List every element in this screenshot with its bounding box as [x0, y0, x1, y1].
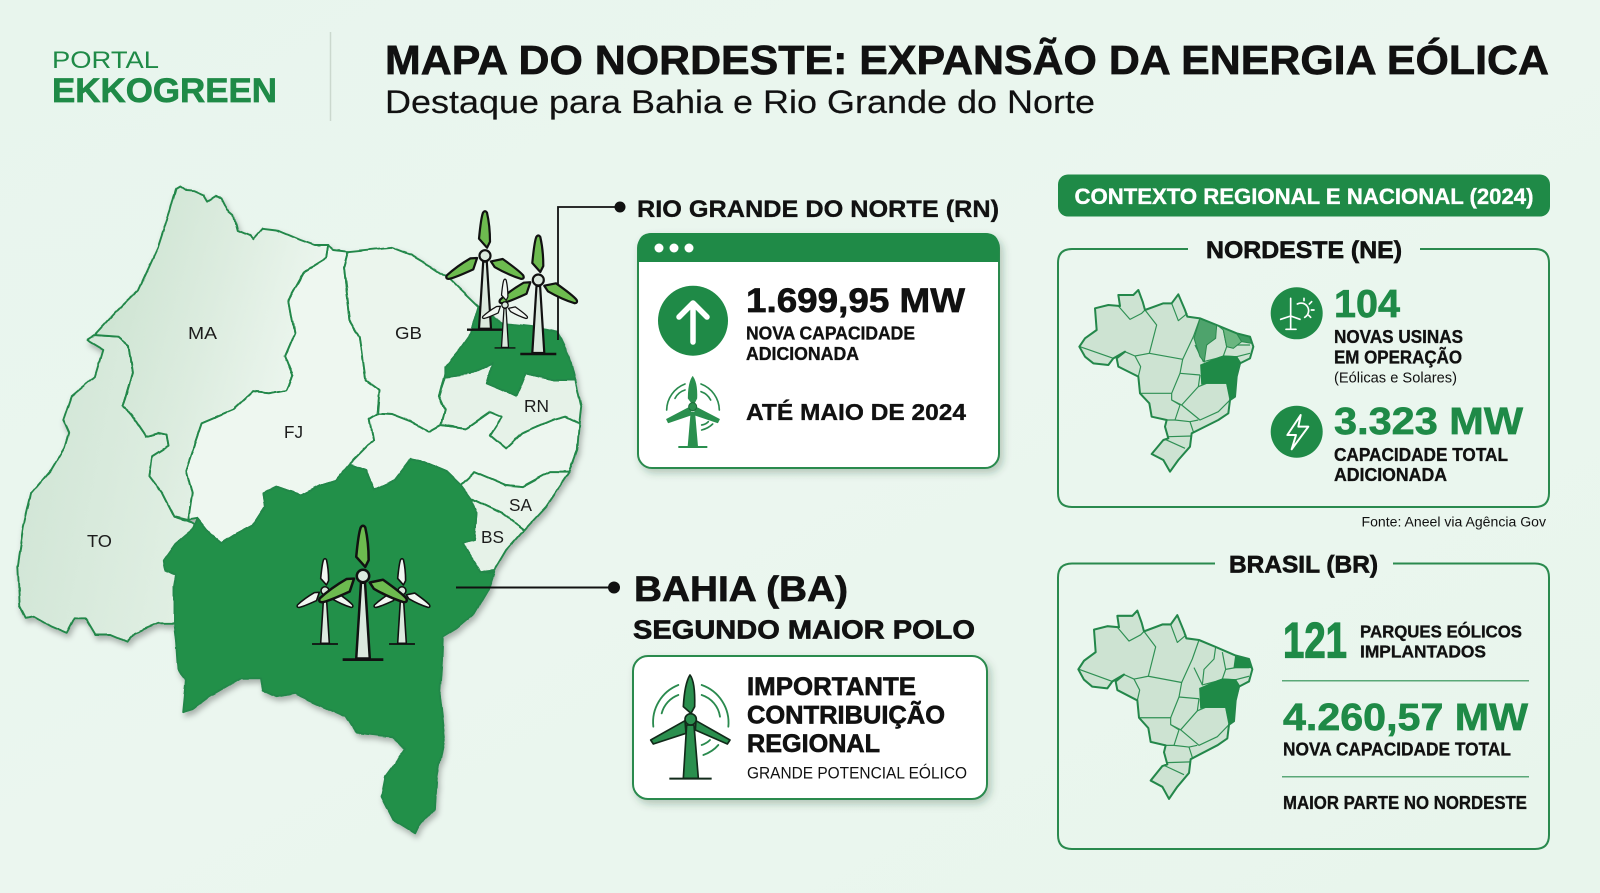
stat label: RN capacity: NOVA CAPACIDADE: [746, 324, 915, 344]
panel: Nordeste: [1058, 237, 1549, 507]
stat label: parques eólicos: IMPLANTADOS: [1360, 642, 1486, 662]
banner: contexto regional e nacional: [1058, 174, 1550, 216]
text: Até maio de 2024: ATÉ MAIO DE 2024: [746, 398, 966, 425]
header logo: Portal Ekkogreen: PORTAL: [52, 47, 159, 74]
stat label: novas usinas: EM OPERAÇÃO: [1334, 346, 1462, 368]
title: MAPA DO NORDESTE: EXPANSÃO DA ENERGIA EÓLICA: [385, 37, 1549, 83]
text: importante contribuição regional: REGIONAL: [747, 730, 880, 758]
panel: Rio Grande do Norte card: [638, 233, 999, 468]
map: Brazil with Northeast highlighted: [1079, 290, 1253, 472]
icon: up arrow: [658, 286, 728, 356]
state label: BS: BS: [481, 527, 504, 547]
stat label: novas usinas: (Eólicas e Solares): [1334, 370, 1457, 386]
wind turbines on Bahia: [295, 526, 432, 660]
connector: Rio Grande do Norte: [558, 202, 626, 340]
stat: 3.323 MW: 3.323 MW: [1334, 401, 1523, 443]
header logo: Portal Ekkogreen: EKKOGREEN: [52, 72, 277, 110]
stat label: capacidade total adicionada: ADICIONADA: [1334, 465, 1447, 485]
subheading: Segundo maior polo: SEGUNDO MAIOR POLO: [633, 616, 975, 644]
stat label: RN capacity: ADICIONADA: [746, 344, 859, 364]
banner: contexto regional e nacional: CONTEXTO REGIONAL E NACIONAL (2024): [1074, 184, 1534, 209]
stat: 121: 121: [1283, 612, 1347, 668]
stat label: novas usinas: NOVAS USINAS: [1334, 327, 1463, 347]
source note: Fonte: Aneel via Agência Gov: [1362, 514, 1546, 530]
text: grande potencial eólico: GRANDE POTENCIAL EÓLICO: [747, 764, 967, 782]
text: importante contribuição regional: IMPORTANTE: [747, 673, 916, 701]
stat label: RN capacity: [746, 324, 915, 364]
text: importante contribuição regional: [747, 673, 945, 758]
state label: GB: GB: [395, 323, 422, 343]
state label: RN: RN: [524, 396, 549, 416]
stat label: novas usinas: [1334, 327, 1463, 386]
stat: RN capacity: 1.699,95 MW: [746, 282, 966, 320]
stat: 104: 104: [1334, 283, 1400, 326]
heading: Bahia: BAHIA (BA): [634, 570, 848, 609]
state label: SA: SA: [509, 495, 532, 515]
icon: lightning bolt: [1271, 406, 1323, 458]
state label: TO: TO: [87, 531, 112, 551]
stat: 4.260,57 MW: 4.260,57 MW: [1283, 697, 1528, 739]
stat label: nova capacidade total: NOVA CAPACIDADE TOTAL: [1283, 740, 1511, 760]
map: Brazil with Bahia and Rio Grande do Norte highlighted: [1078, 611, 1252, 799]
stat label: parques eólicos: PARQUES EÓLICOS: [1360, 620, 1522, 642]
state label: FJ: FJ: [284, 422, 303, 442]
heading: Rio Grande do Norte: RIO GRANDE DO NORTE (RN): [637, 196, 999, 223]
text: maior parte no nordeste: MAIOR PARTE NO NORDESTE: [1283, 793, 1527, 813]
wind turbines on Rio Grande do Norte: [444, 211, 580, 354]
text: importante contribuição regional: CONTRIBUIÇÃO: [747, 700, 945, 730]
panel: Brasil: [1058, 552, 1549, 849]
icon: turbine and sun: [1271, 287, 1323, 339]
icon: turbine: [667, 377, 719, 447]
panel: Bahia card: [633, 656, 987, 799]
icon: turbine: [651, 675, 730, 779]
stat label: capacidade total adicionada: [1334, 445, 1508, 485]
connector: Bahia: [456, 582, 620, 594]
state label: MA: MA: [188, 323, 217, 343]
stat label: parques eólicos: [1360, 620, 1522, 662]
stat label: capacidade total adicionada: CAPACIDADE TOTAL: [1334, 445, 1508, 465]
map of the Northeast: [18, 186, 581, 833]
heading: Brasil (BR): BRASIL (BR): [1229, 552, 1378, 578]
subtitle: Destaque para Bahia e Rio Grande do Norte: [385, 84, 1095, 120]
heading: Nordeste (NE): NORDESTE (NE): [1206, 237, 1402, 264]
header logo: Portal Ekkogreen: [52, 47, 277, 110]
